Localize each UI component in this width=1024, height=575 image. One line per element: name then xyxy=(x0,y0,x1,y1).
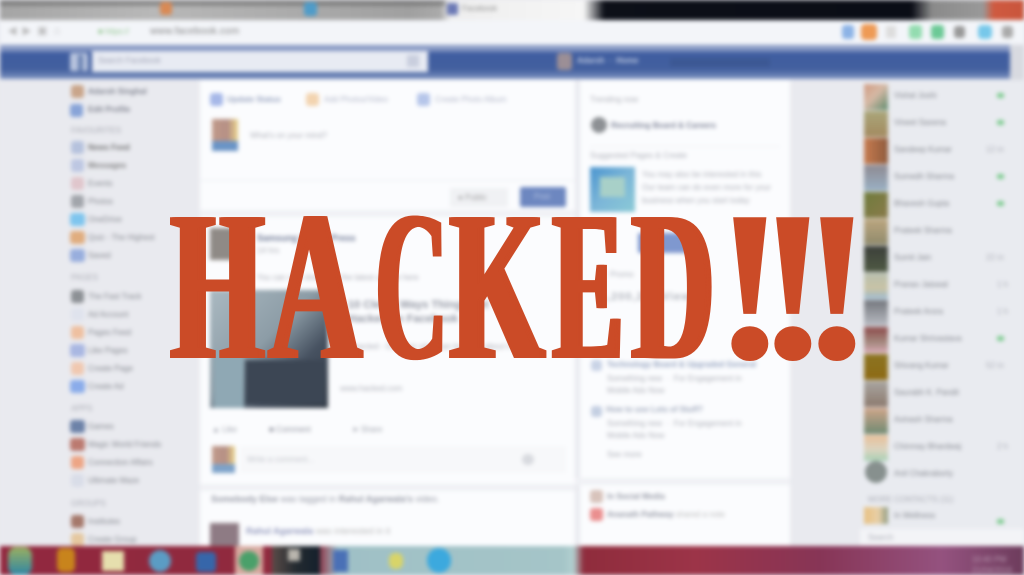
news detail xyxy=(606,419,742,440)
news detail: Something new · For Engagement in xyxy=(607,419,742,428)
letter A: A xyxy=(266,166,359,405)
feed gap xyxy=(200,210,575,217)
logo xyxy=(70,53,88,71)
online dot xyxy=(997,336,1004,341)
contact avatar xyxy=(864,300,888,326)
secure indicator: ■ https:// xyxy=(98,27,129,36)
comment action: ■ Comment xyxy=(269,425,311,434)
app icon: dark window xyxy=(272,546,320,575)
post text: You can now download the latest update here xyxy=(257,273,419,282)
sidebar row xyxy=(70,420,85,433)
system clock: 10:40 PM xyxy=(972,555,1006,564)
app icon: skype xyxy=(427,548,451,573)
sidebar row xyxy=(71,326,84,339)
search box: Search Facebook xyxy=(98,56,161,65)
contact name: Avinash Sharma xyxy=(894,415,953,424)
online dot xyxy=(997,120,1004,125)
sidebar row xyxy=(71,533,84,546)
sidebar label: Games xyxy=(88,422,114,431)
contact name: Vineet Saxena xyxy=(894,118,946,127)
ad label: Promo xyxy=(610,270,634,279)
sidebar heading: APPS xyxy=(71,404,92,413)
app icon: chrome xyxy=(235,546,263,575)
contact name: Sumedh Sharma xyxy=(894,172,954,181)
contact avatar xyxy=(864,138,888,164)
sidebar label: Edit Profile xyxy=(88,105,130,114)
news detail: Mobile Ads Now xyxy=(607,386,664,395)
news detail: Mobile Ads Now xyxy=(607,431,664,440)
sidebar label: Create Group xyxy=(88,535,136,544)
center feed column xyxy=(200,80,575,547)
sidebar label: Create Page xyxy=(88,364,133,373)
post date: 14 hrs xyxy=(257,246,279,255)
composer divider xyxy=(200,180,575,181)
sidebar row xyxy=(70,213,85,226)
sidebar label: Pages Feed xyxy=(88,328,131,337)
post author avatar xyxy=(210,228,236,260)
online dot xyxy=(997,519,1004,524)
sidebar row xyxy=(70,249,85,262)
next post avatar xyxy=(210,523,239,547)
composer placeholder: What's on your mind? xyxy=(250,131,327,140)
sidebar row xyxy=(70,104,83,117)
right content column xyxy=(580,80,790,547)
search box xyxy=(92,51,428,72)
contact name: Bhavesh Gupta xyxy=(894,199,949,208)
app icon: notes xyxy=(102,551,124,571)
online dot xyxy=(997,201,1004,206)
contact avatar xyxy=(864,111,888,137)
sidebar label: Institutes xyxy=(88,517,120,526)
panel heading: Trending now xyxy=(590,95,638,104)
app icon: folder xyxy=(57,548,75,572)
suggestion icon xyxy=(590,490,603,503)
exclamation mark: ! xyxy=(799,166,875,405)
comment input xyxy=(240,446,566,473)
sidebar heading: GROUPS xyxy=(71,499,106,508)
system clock xyxy=(972,554,1013,575)
sidebar row xyxy=(71,290,84,303)
contact avatar xyxy=(864,192,888,218)
ad thumbnail xyxy=(590,167,635,212)
exclamation mark: ! xyxy=(755,166,831,405)
last active: 2 h xyxy=(997,442,1008,451)
chat group heading: MORE CONTACTS (11) xyxy=(868,495,953,504)
sidebar row xyxy=(70,231,85,244)
letter D: D xyxy=(629,166,711,405)
share action: ➤ Share xyxy=(352,425,382,434)
facebook top bar xyxy=(0,45,1010,79)
news detail xyxy=(606,374,742,395)
news headline: How to use Lots of Stuff? xyxy=(606,405,703,414)
last active: 22 m xyxy=(986,253,1004,262)
tab icon: facebook xyxy=(447,3,458,15)
system clock: 21/04/2016 xyxy=(972,566,1012,575)
news item xyxy=(591,360,602,371)
contact avatar xyxy=(864,165,888,191)
contact name: Prateek Arora xyxy=(894,307,943,316)
sidebar row xyxy=(71,515,84,528)
contact avatar xyxy=(864,273,888,299)
article source: www.hacked.com xyxy=(340,384,402,393)
contact name: Anil Chakraborty xyxy=(894,469,953,478)
tab icon: orange xyxy=(160,2,172,15)
online dot xyxy=(997,93,1004,98)
sidebar label: Events xyxy=(88,179,112,188)
post button xyxy=(520,187,566,207)
sidebar row xyxy=(71,474,84,487)
nav icons xyxy=(670,58,770,67)
contact name: Prateek Sharma xyxy=(894,226,952,235)
sidebar row xyxy=(71,85,84,98)
sidebar heading: PAGES xyxy=(71,273,98,282)
sidebar label: Quiz - The Highest xyxy=(88,233,155,242)
group avatar xyxy=(591,117,607,133)
app icon: media xyxy=(196,552,216,572)
sidebar row xyxy=(71,308,84,321)
composer tab icon xyxy=(306,93,319,106)
last active: 12 m xyxy=(986,145,1004,154)
letter C: C xyxy=(373,166,446,405)
comment avatar xyxy=(212,446,235,473)
contact avatar xyxy=(864,219,888,245)
panel divider xyxy=(590,146,780,147)
article title xyxy=(347,298,490,325)
suggestion label: Ananath Pathway shared a note xyxy=(607,510,725,519)
contact avatar xyxy=(864,84,888,110)
next post summary: Somebody Else was tagged in Rahul Agarwala's video. xyxy=(211,494,439,504)
profile name: Adarsh · Home xyxy=(577,56,638,65)
group name: In Wellness xyxy=(894,511,935,520)
sidebar label: Adarsh Singhal xyxy=(88,87,147,96)
ad text: business when you start today xyxy=(642,196,750,205)
title: HACKED!!! xyxy=(168,166,875,405)
post author: Samsung Mobile Press xyxy=(257,233,356,243)
contact name: Shivang Kumar xyxy=(894,361,949,370)
feed gap xyxy=(200,484,575,491)
online dot xyxy=(997,174,1004,179)
url text: www.facebook.com xyxy=(150,26,239,37)
sidebar label: Ultimate Maze xyxy=(88,476,139,485)
chat sidebar xyxy=(860,80,1024,547)
last active: 1 h xyxy=(997,307,1008,316)
sponsored heading: Suggested Pages & Create xyxy=(590,151,687,160)
sidebar row xyxy=(70,438,85,451)
contact name: Vishal Joshi xyxy=(894,91,937,100)
chat search: Search xyxy=(868,533,893,542)
contact name: Sumit Jain xyxy=(894,253,931,262)
composer tab icon xyxy=(210,93,223,106)
ad text: Our team can do even more for your xyxy=(642,183,771,192)
contact name: Chinmay Bhardwaj xyxy=(894,442,961,451)
post button: Post xyxy=(534,192,550,201)
navigation buttons: ◀ ▶ ▣ ⌂ xyxy=(8,25,60,37)
news item xyxy=(591,406,602,417)
sidebar label: Photos xyxy=(88,197,113,206)
app icon: word xyxy=(333,550,348,572)
tab title: Facebook xyxy=(462,4,497,13)
sidebar row xyxy=(71,177,84,190)
sidebar row xyxy=(71,362,84,375)
sidebar row xyxy=(71,456,84,469)
left sidebar xyxy=(0,80,200,547)
group avatar xyxy=(864,507,888,524)
right scrollbar gutter xyxy=(1010,45,1024,80)
sidebar label: OneDrive xyxy=(88,215,122,224)
news headline: Technology Board & Upgraded General xyxy=(607,360,756,369)
right column edge fade xyxy=(790,80,860,547)
contact avatar xyxy=(864,246,888,272)
chat search xyxy=(860,529,1024,547)
sidebar heading: FAVOURITES xyxy=(71,126,121,135)
sidebar label: Connection Affairs xyxy=(88,458,153,467)
letter K: K xyxy=(447,166,541,405)
contact name: Sandeep Kumar xyxy=(894,145,952,154)
sidebar row xyxy=(70,380,85,393)
browser tab strip xyxy=(0,0,1024,20)
profile avatar xyxy=(557,53,572,70)
contact name: Kumar Shrivastava xyxy=(894,334,962,343)
sidebar row xyxy=(71,195,84,208)
sidebar label: Magic World Friends xyxy=(88,440,161,449)
audience button xyxy=(450,188,508,207)
contact avatar xyxy=(864,408,888,434)
sidebar label: Ad Account xyxy=(88,310,128,319)
news detail: Something new · For Engagement in xyxy=(607,374,742,383)
audience button: ● Public xyxy=(458,193,487,202)
article title: Hacked on Facebook xyxy=(348,313,458,325)
tab icon: blue xyxy=(304,2,317,16)
composer tab: Create Photo Album xyxy=(435,95,507,104)
next post author: Rahul Agarwala was interested in it xyxy=(246,526,390,536)
composer avatar xyxy=(212,119,238,151)
sidebar row xyxy=(71,141,84,154)
exclamation mark: ! xyxy=(712,166,788,405)
sidebar row xyxy=(70,344,85,357)
sidebar label: The Fast Track xyxy=(88,292,141,301)
composer tab: Update Status xyxy=(227,95,281,104)
sidebar label: Saved xyxy=(88,251,111,260)
address bar xyxy=(0,20,1024,44)
contact name: Saurabh K. Pandit xyxy=(894,388,959,397)
sidebar label: Messages xyxy=(88,161,126,170)
contact avatar xyxy=(865,461,887,483)
suggestion label: In Social Media xyxy=(607,492,665,501)
article title: 10 Clever Ways Things Get xyxy=(348,299,489,311)
see more: See more xyxy=(607,450,642,459)
contact name: Pranav Jaiswal xyxy=(894,280,948,289)
ad button xyxy=(638,233,690,253)
panel gap xyxy=(575,478,795,485)
contact avatar xyxy=(864,354,888,380)
contact avatar xyxy=(864,381,888,407)
comment input: Write a comment... xyxy=(247,455,314,464)
last active: 1 h xyxy=(997,280,1008,289)
group name: Recruiting Board & Careers xyxy=(611,121,716,130)
extension icons xyxy=(839,20,1016,44)
contact avatar xyxy=(864,435,888,461)
composer tab: Add Photos/Video xyxy=(324,95,388,104)
contact avatar xyxy=(864,327,888,353)
sidebar label: News Feed xyxy=(88,143,130,152)
suggestion icon xyxy=(590,508,603,521)
composer tab icon xyxy=(417,93,430,106)
sidebar label: Create Ad xyxy=(88,382,124,391)
start button xyxy=(8,547,32,575)
letter H: H xyxy=(168,166,259,405)
article description: Connected - Discover what can be done about it xyxy=(340,342,511,351)
last active: 52 m xyxy=(986,361,1004,370)
like action: ▲ Like xyxy=(212,425,237,434)
letter E: E xyxy=(550,166,620,405)
ad text: You may also be interested in this xyxy=(642,170,761,179)
ad text xyxy=(641,170,771,205)
sidebar label: Like Pages xyxy=(88,346,128,355)
stat heading: 1,200,234 Views xyxy=(600,291,698,303)
desktop taskbar xyxy=(0,546,1024,575)
post image xyxy=(210,290,328,408)
tab shadow xyxy=(0,0,445,6)
app icon: yellow xyxy=(389,553,403,569)
app icon: browser xyxy=(149,550,171,572)
sidebar row xyxy=(71,159,84,172)
